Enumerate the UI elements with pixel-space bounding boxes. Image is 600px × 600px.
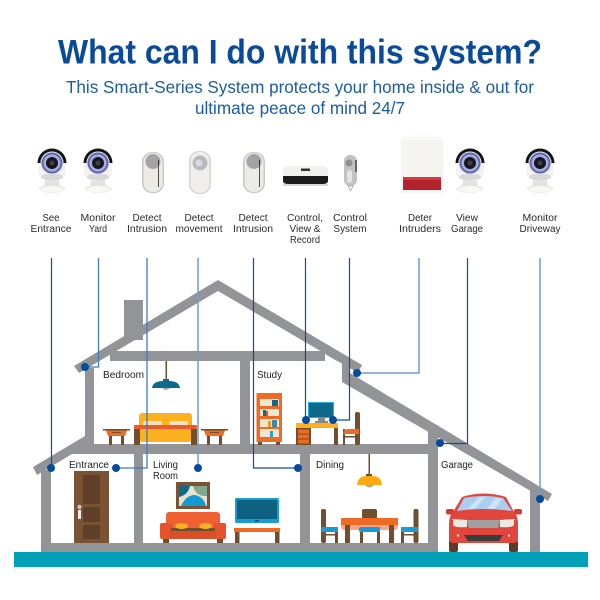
callout line: view garage <box>436 258 468 447</box>
icon: remote control <box>344 155 357 191</box>
device labels: Intrusion <box>127 224 167 235</box>
device labels: View & <box>290 224 321 235</box>
device labels: Deter <box>408 213 433 224</box>
house structure <box>33 280 552 552</box>
device labels: Garage <box>451 224 483 235</box>
icon: siren <box>401 135 443 193</box>
device labels: Monitor <box>522 213 558 224</box>
icon: camera see entrance <box>38 148 66 193</box>
device labels: Detect <box>132 213 162 224</box>
study desk <box>296 423 338 445</box>
device labels: View <box>456 213 479 224</box>
callout line: control view record <box>302 258 310 424</box>
device labels <box>30 213 560 246</box>
device labels: Intruders <box>399 224 441 235</box>
icon: camera monitor driveway <box>526 148 554 193</box>
bedroom lamp <box>152 361 180 390</box>
room labels: Bedroom <box>103 370 144 381</box>
device labels: Record <box>290 235 320 246</box>
icon: sensor detect movement <box>189 151 211 194</box>
device labels: Driveway <box>520 224 560 235</box>
bed <box>134 413 197 445</box>
bookshelf <box>256 393 282 445</box>
title: What can I do with this system? <box>58 34 542 72</box>
subtitle: ultimate peace of mind 24/7 <box>195 98 405 118</box>
dining lamp <box>357 454 382 488</box>
device labels: Detect <box>184 213 214 224</box>
door <box>74 471 109 543</box>
computer monitor <box>308 402 334 423</box>
icon: sensor detect intrusion 2 <box>243 152 265 193</box>
callout line: control system <box>329 258 350 424</box>
bedside table right <box>201 429 228 445</box>
room labels: Dining <box>316 460 344 471</box>
callout line: detect intrusion entrance <box>112 258 147 472</box>
room labels: Study <box>257 370 282 381</box>
device labels: Yard <box>89 224 107 235</box>
television <box>235 498 279 523</box>
device labels: movement <box>176 224 223 235</box>
room labels: Garage <box>441 460 473 471</box>
room labels: Living <box>153 460 178 471</box>
device labels: Intrusion <box>233 224 273 235</box>
device labels: Control, <box>287 213 323 224</box>
callout line: see entrance <box>47 258 55 472</box>
callout line: monitor yard <box>81 258 98 371</box>
car <box>446 494 522 552</box>
device labels: Detect <box>238 213 268 224</box>
device labels: Entrance <box>30 224 72 235</box>
room labels: Entrance <box>69 460 109 471</box>
icon: control hub <box>283 166 328 186</box>
callout line: detect movement <box>194 258 202 472</box>
callout line: detect intrusion dining <box>254 258 302 472</box>
ground strip <box>14 552 588 567</box>
device labels: Control <box>333 213 367 224</box>
room labels <box>69 370 473 482</box>
device labels: Monitor <box>80 213 116 224</box>
subtitle: This Smart-Series System protects your home inside & out for <box>66 77 534 97</box>
callout line: monitor driveway <box>536 258 544 503</box>
icon: sensor detect intrusion <box>142 152 164 193</box>
wall picture <box>176 482 210 509</box>
room labels: Room <box>153 471 178 482</box>
dining set <box>321 509 418 543</box>
device labels: See <box>42 213 60 224</box>
callout line: deter intruders <box>353 258 419 377</box>
study chair <box>343 412 360 445</box>
subtitle <box>66 77 534 118</box>
device labels: System <box>334 224 366 235</box>
bedside table left <box>103 429 130 445</box>
icon: camera monitor yard <box>84 148 112 193</box>
sofa <box>160 512 226 543</box>
icon: camera view garage <box>456 148 484 193</box>
tv table <box>234 528 280 543</box>
